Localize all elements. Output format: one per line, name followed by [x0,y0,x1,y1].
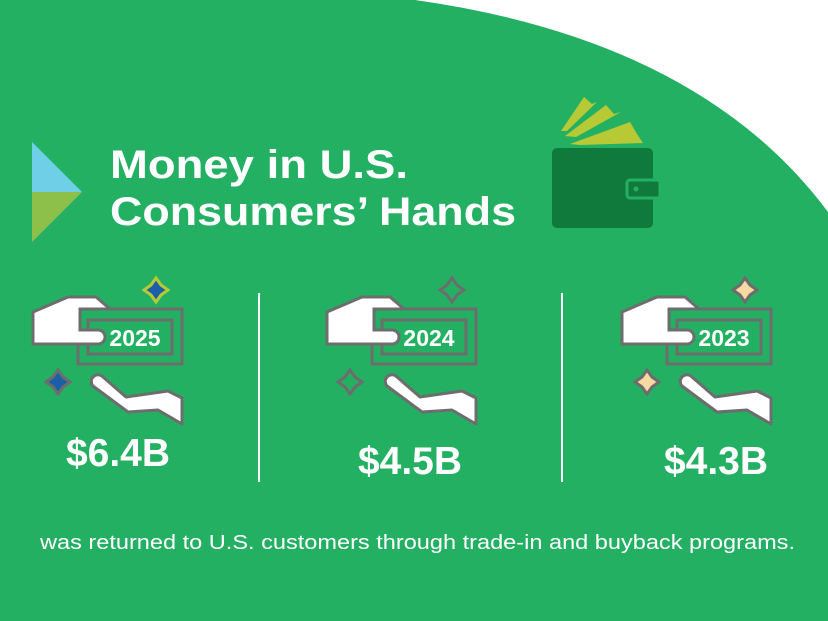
icon: 2024 money exchange [327,278,476,424]
icon: 2024 money exchange: 2024 [403,325,455,351]
value 2025: $6.4B [66,432,170,475]
title: Consumers’ Hands [110,190,516,234]
footer text: was returned to U.S. customers through trade-in and buyback programs. [39,532,795,554]
logo triangle [32,142,82,242]
icon: wallet [552,97,660,228]
icon: 2023 money exchange: 2023 [698,325,750,351]
icon: 2025 money exchange [33,278,182,424]
value 2024: $4.5B [358,440,462,483]
dividers [258,293,260,482]
icon: 2023 money exchange [622,278,771,424]
icon: 2025 money exchange: 2025 [109,325,161,351]
title: Money in U.S. [110,143,408,187]
value 2023: $4.3B [664,440,768,483]
